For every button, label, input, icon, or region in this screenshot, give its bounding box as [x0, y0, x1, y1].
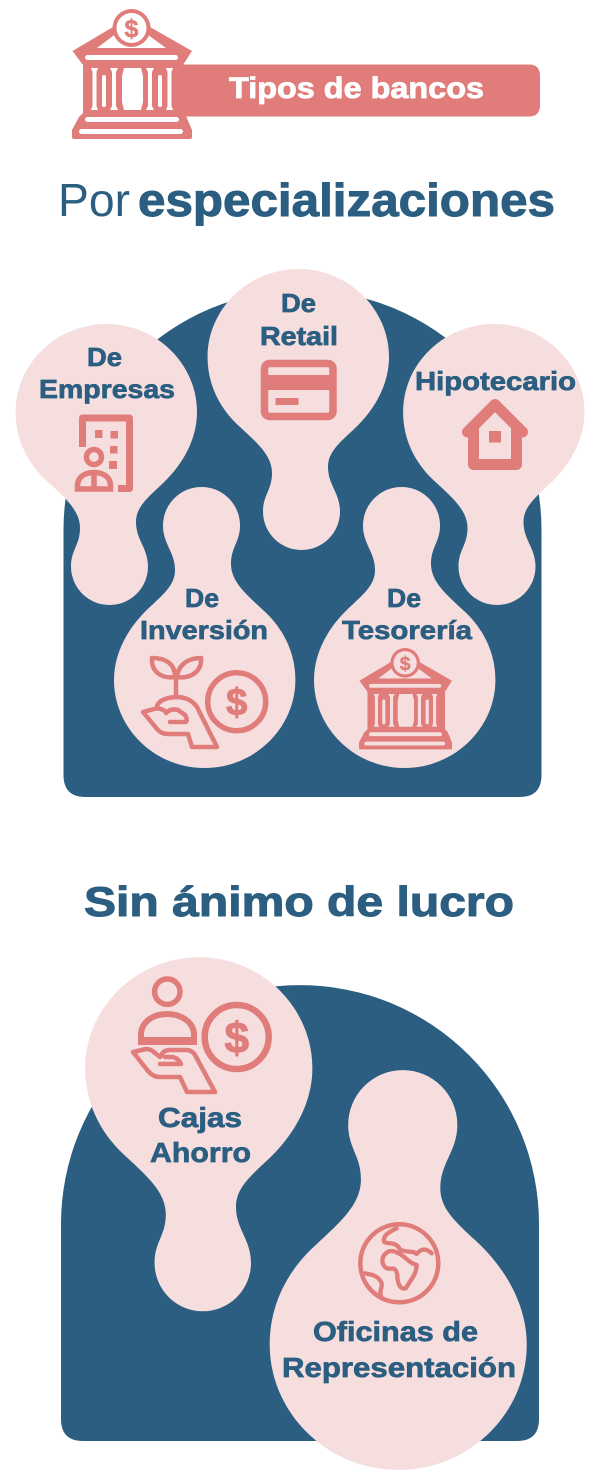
icon: plant in hand with coin: $ [226, 682, 247, 724]
icon: plant in hand with coin [143, 658, 266, 747]
panel: Hipotecario [403, 324, 584, 605]
header: Tipos de bancos [72, 9, 540, 139]
panel: De Empresas [16, 324, 197, 605]
panel: De Retail [208, 269, 389, 550]
panel: Oficinas de Representación: Oficinas de [313, 1316, 478, 1347]
panel: De Tesorería [314, 487, 495, 768]
icon: bank: $ [125, 15, 139, 43]
heading: Por especializaciones: especializaciones [138, 174, 555, 226]
panel: dark background sin ánimo de lucro [61, 985, 539, 1441]
icon: globe [360, 1224, 438, 1302]
icon: credit card [264, 364, 333, 416]
header ribbon [175, 64, 540, 116]
panel: De Empresas: Empresas [39, 374, 175, 404]
panel: Oficinas de Representación [270, 1070, 527, 1470]
icon: bank [72, 9, 192, 139]
icon: person with tray, hand and coin: $ [224, 1014, 249, 1063]
heading: Por especializaciones: Por [58, 174, 130, 226]
icon: bank with coin [359, 648, 452, 749]
panel: De Retail: De [281, 288, 316, 318]
icon: house [468, 404, 522, 464]
panel: dark background especializaciones [64, 290, 542, 797]
panel: De Inversión [114, 487, 295, 768]
panel: Cajas Ahorro [85, 957, 312, 1311]
icon: person with tray, hand and coin [133, 979, 269, 1092]
panel: Oficinas de Representación: Representación [282, 1352, 516, 1383]
panel: De Inversión: Inversión [140, 615, 268, 645]
panel: De Tesorería: De [387, 583, 421, 613]
icon: bank with coin: $ [400, 653, 411, 675]
panel: De Tesorería: Tesorería [342, 615, 473, 645]
panel: Cajas Ahorro: Ahorro [150, 1137, 251, 1168]
icon: office building and person [78, 418, 130, 489]
panel: Hipotecario: Hipotecario [415, 366, 576, 396]
panel: De Retail: Retail [260, 321, 338, 351]
panel: De Empresas: De [87, 342, 122, 372]
header title: Tipos de bancos [229, 72, 484, 105]
heading: Sin ánimo de lucro: Sin ánimo de lucro [84, 878, 514, 925]
panel: Cajas Ahorro: Cajas [158, 1102, 242, 1133]
panel: De Inversión: De [185, 583, 219, 613]
